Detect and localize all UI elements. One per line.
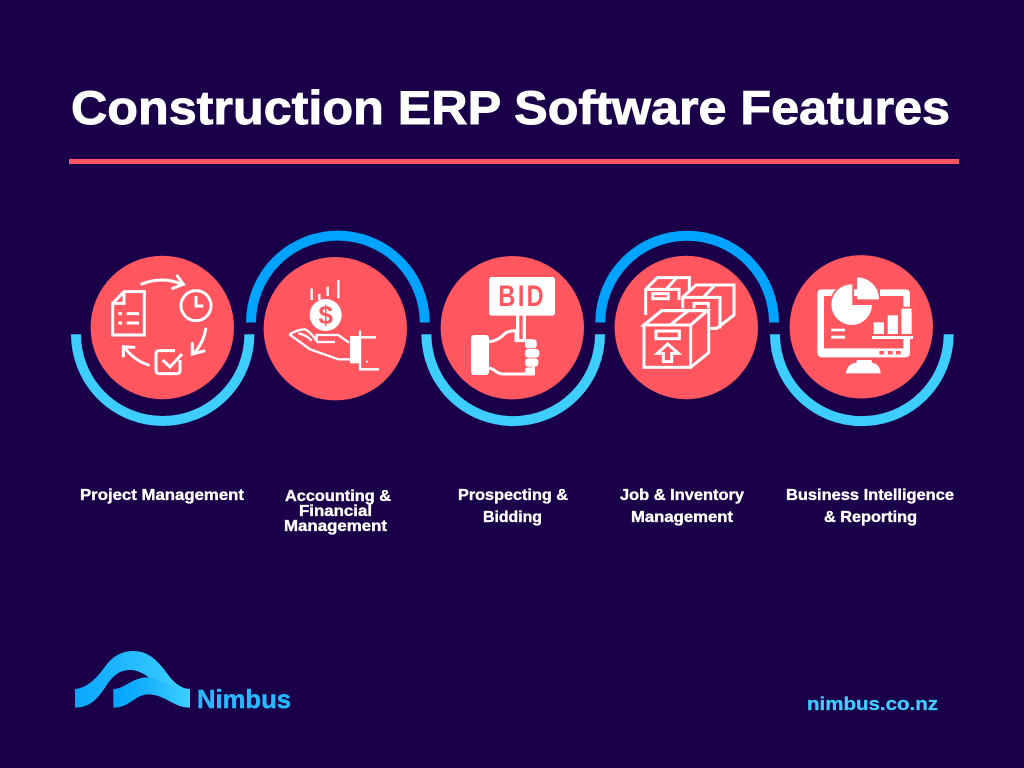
title underline xyxy=(69,159,959,164)
label: job and inventory management: Job & Inventory xyxy=(620,487,744,504)
title: Construction ERP Software Features xyxy=(71,81,950,134)
label: prospecting and bidding xyxy=(458,487,568,526)
website url: nimbus.co.nz xyxy=(807,693,938,714)
arc: lower arc 5 xyxy=(775,334,949,421)
label: prospecting and bidding: Prospecting & xyxy=(458,487,568,504)
label: job and inventory management: Management xyxy=(631,509,733,526)
label: prospecting and bidding: Bidding xyxy=(483,509,542,526)
label: accounting and financial management: Management xyxy=(284,518,387,535)
label: accounting and financial management: Financial xyxy=(299,503,372,520)
icon: dollar sign: $ xyxy=(318,300,333,330)
panel: accounting circle xyxy=(264,257,407,400)
icon: stacked boxes xyxy=(644,278,734,367)
label: business intelligence and reporting: & Reporting xyxy=(824,509,917,526)
logo: Nimbus: Nimbus xyxy=(197,684,291,714)
logo: Nimbus xyxy=(75,651,291,714)
label: business intelligence and reporting xyxy=(786,487,954,526)
label: project management: Project Management xyxy=(80,487,244,504)
icon: hand with falling coin xyxy=(289,280,379,369)
arc: lower arc 1 xyxy=(76,334,249,421)
panel: business intelligence circle xyxy=(790,255,933,398)
icon: project management cycle xyxy=(113,276,211,374)
arc: lower arc 3 xyxy=(426,334,600,421)
icon: monitor with charts xyxy=(817,277,915,373)
label: accounting and financial management: Accounting & xyxy=(285,488,391,505)
arc: upper arc 2 xyxy=(251,236,425,322)
panel: project management circle xyxy=(91,256,234,399)
label: business intelligence and reporting: Business Intelligence xyxy=(786,487,954,504)
icon: hand holding bid sign: BID xyxy=(498,279,544,313)
label: accounting and financial management xyxy=(284,488,391,535)
panel: inventory circle xyxy=(615,256,758,399)
icon: hand holding bid sign xyxy=(471,277,555,375)
panel: prospecting circle xyxy=(441,256,584,399)
label: job and inventory management xyxy=(620,487,744,526)
arc: upper arc 4 xyxy=(600,236,774,322)
